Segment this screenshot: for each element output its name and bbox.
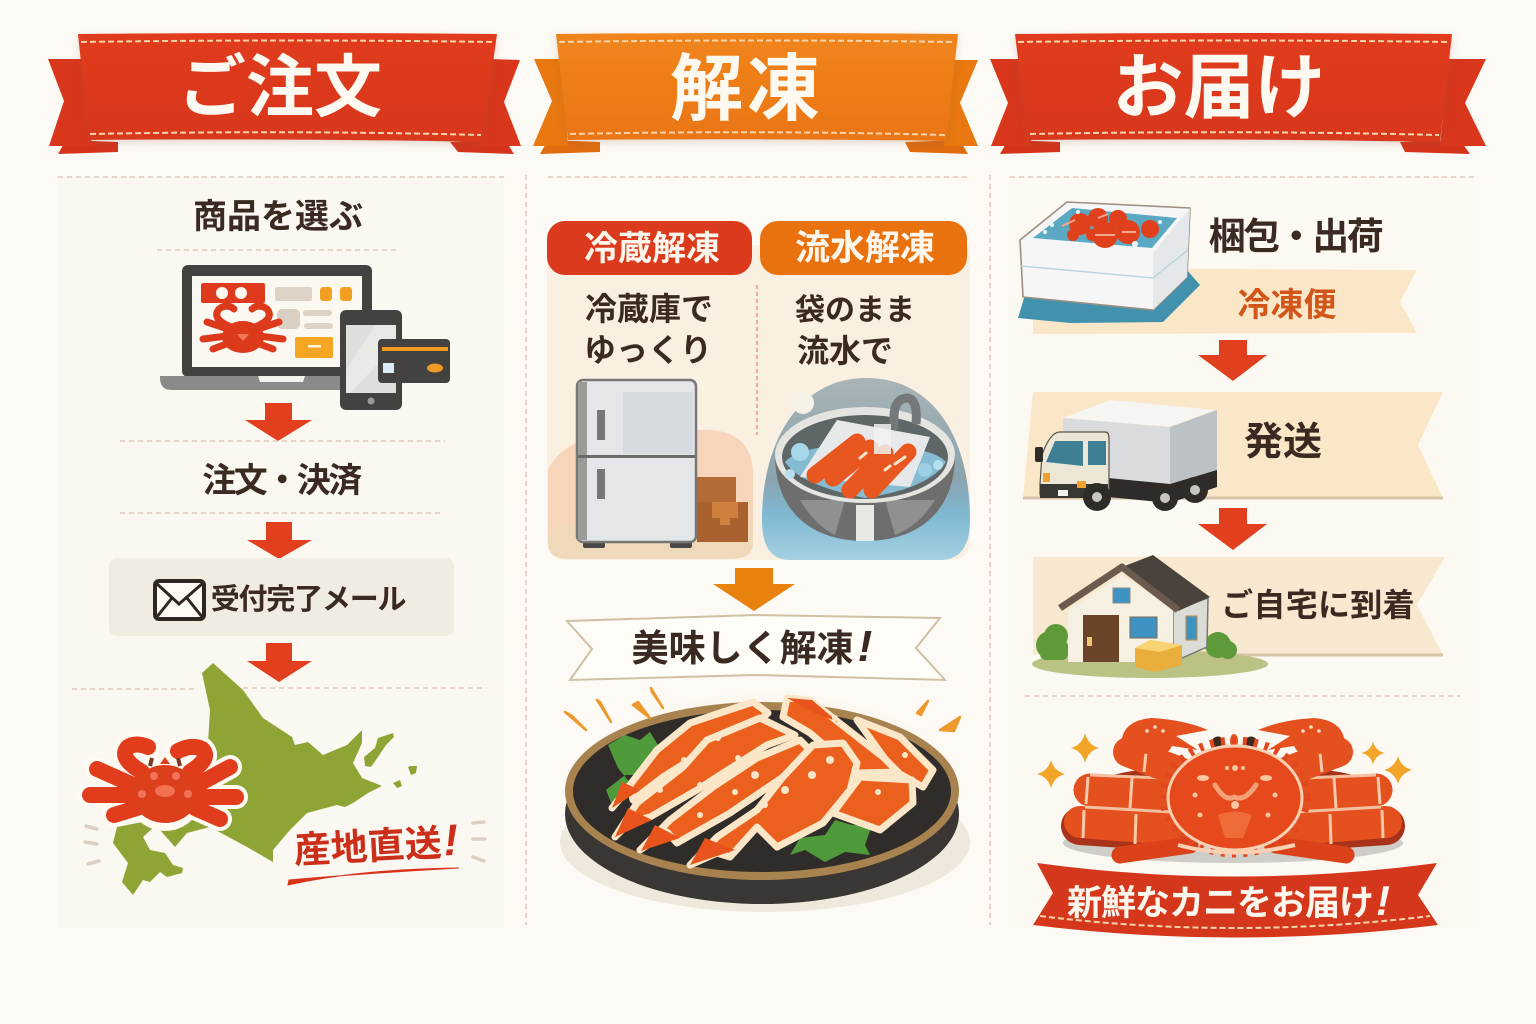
icon: refrigerator with boxes: [548, 380, 753, 559]
ribbon: home arrival: [1033, 557, 1445, 655]
ribbon: refrigerated shipping: [1033, 268, 1417, 334]
text: order and payment: 注文・決済: [202, 462, 362, 500]
banner: delivering fresh crab: 新鮮なカニをお届け!: [1067, 877, 1390, 924]
panel: order column background: [58, 178, 503, 928]
heading ribbon: thawing: [533, 33, 978, 154]
arrow: order step 2: [247, 522, 312, 559]
label: running water thaw: [760, 221, 967, 275]
heading ribbon: thawing: 解凍: [670, 49, 824, 130]
banner: deliciously thawed: [567, 615, 945, 680]
heading ribbon: delivery: お届け: [1112, 49, 1326, 128]
label: refrigerator thaw: [547, 221, 752, 275]
text: running water in bag: [795, 294, 915, 369]
arrow: thaw to banner: [713, 568, 795, 611]
illustration: whole red crab: [1063, 718, 1403, 863]
text: running water in bag: 流水で: [797, 333, 893, 369]
text: slowly in refrigerator: ゆっくり: [584, 332, 712, 368]
banner: delivering fresh crab: [1033, 863, 1438, 938]
text: choose product: 商品を選ぶ: [193, 198, 363, 236]
text: running water in bag: 袋のまま: [795, 294, 915, 327]
text: slowly in refrigerator: 冷蔵庫で: [585, 291, 713, 327]
icon: crab sticker on map: [90, 744, 236, 831]
label: refrigerator thaw: 冷蔵解凍: [584, 230, 720, 268]
map: Hokkaido: [113, 663, 417, 895]
arrow: delivery step 2: [1198, 508, 1267, 550]
banner: deliciously thawed: 美味しく解凍!: [632, 622, 872, 671]
ribbon: home arrival: ご自宅に到着: [1221, 587, 1415, 623]
panel: thaw methods background: [547, 245, 970, 560]
text: packing and shipping: 梱包・出荷: [1209, 216, 1383, 257]
icon: delivery truck: [1035, 400, 1217, 511]
callout: order confirmation mail: 受付完了メール: [211, 583, 406, 616]
icon: laptop, phone and credit card: [160, 265, 450, 410]
icon: foam box with crabs: [1018, 202, 1200, 323]
callout: direct from origin: 産地直送!: [292, 816, 459, 873]
ribbon: shipping: 発送: [1244, 421, 1322, 464]
panel: delivery column background: [1010, 178, 1475, 928]
ribbon: refrigerated shipping: 冷凍便: [1238, 286, 1336, 323]
label: running water thaw: 流水解凍: [795, 229, 935, 268]
heading ribbon: delivery: [990, 33, 1486, 154]
icon: house with package: [1032, 555, 1268, 678]
callout: direct from origin: [85, 816, 485, 885]
heading ribbon: order: [48, 33, 521, 154]
ribbon: shipping: [1023, 392, 1443, 498]
arrow: order step 1: [245, 403, 312, 441]
text: slowly in refrigerator: [584, 291, 713, 368]
callout: order confirmation mail: [109, 558, 454, 636]
icon: sparkles: [1037, 733, 1412, 788]
illustration: crab legs on plate: [555, 685, 975, 912]
arrow: delivery step 1: [1198, 340, 1267, 381]
icon: bowl under running water: [762, 378, 970, 560]
arrow: order step 3: [247, 643, 312, 682]
heading ribbon: order: ご注文: [178, 50, 382, 126]
